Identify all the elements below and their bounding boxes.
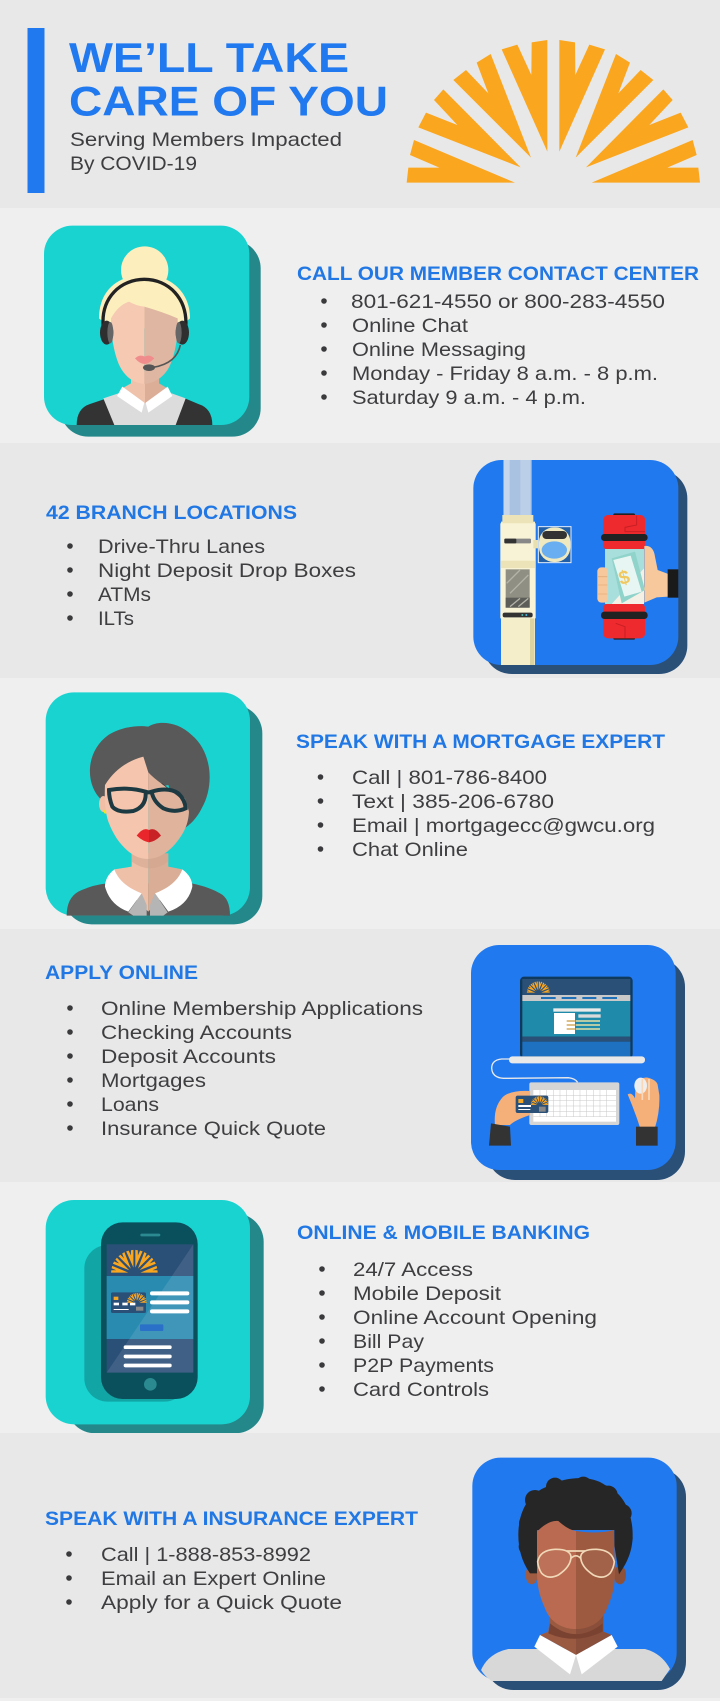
- icon: drive-thru tube station: $: [616, 567, 633, 590]
- icon: insurance expert man: [472, 1458, 686, 1690]
- subtitle: [70, 129, 342, 175]
- title: CARE OF YOU: [69, 78, 388, 124]
- bullet list: Chat Online: [352, 839, 468, 861]
- bullet list: Mobile Deposit: [353, 1283, 502, 1305]
- subtitle: By COVID-19: [70, 153, 197, 175]
- bullet list: Monday - Friday 8 a.m. - 8 p.m.: [352, 363, 658, 385]
- bullet list: Saturday 9 a.m. - 4 p.m.: [352, 387, 586, 409]
- bullet list: Card Controls: [353, 1379, 489, 1401]
- bullet list: P2P Payments: [353, 1355, 494, 1377]
- panel: insurance expert: [0, 1433, 720, 1698]
- bullet list: ILTs: [98, 608, 134, 630]
- bullet list: [66, 1544, 342, 1614]
- bullet list: Bill Pay: [353, 1331, 424, 1353]
- bullet list: Checking Accounts: [101, 1022, 292, 1044]
- bullet list: Loans: [101, 1094, 159, 1116]
- icon: smartphone: [46, 1200, 264, 1433]
- bullet list: Apply for a Quick Quote: [101, 1592, 342, 1614]
- bullet list: Online Messaging: [352, 339, 526, 361]
- bullet list: [67, 536, 356, 630]
- panel: member contact center: [0, 208, 720, 443]
- bullet list: [67, 998, 423, 1140]
- bullet list: Online Chat: [352, 315, 469, 337]
- heading: SPEAK WITH A MORTGAGE EXPERT: [296, 731, 665, 753]
- panel: online and mobile banking: [0, 1182, 720, 1433]
- accent bar: [28, 28, 44, 193]
- bullet list: Mortgages: [101, 1070, 206, 1092]
- panel: mortgage expert: [0, 678, 720, 929]
- icon: sun logo: [407, 40, 700, 183]
- bullet list: Call | 1-888-853-8992: [101, 1544, 311, 1566]
- heading: SPEAK WITH A INSURANCE EXPERT: [45, 1508, 418, 1530]
- bullet list: Email | mortgagecc@gwcu.org: [352, 815, 655, 837]
- heading: 42 BRANCH LOCATIONS: [46, 502, 297, 524]
- icon: laptop, keyboard and card: [471, 945, 685, 1180]
- bullet list: Online Membership Applications: [101, 998, 423, 1020]
- icon: mortgage expert woman: [46, 692, 262, 924]
- panel: apply online: [0, 929, 720, 1182]
- bullet list: [319, 1259, 597, 1401]
- bullet list: Night Deposit Drop Boxes: [98, 560, 356, 582]
- bullet list: Insurance Quick Quote: [101, 1118, 326, 1140]
- bullet list: Deposit Accounts: [101, 1046, 276, 1068]
- panel: branch locations: [0, 443, 720, 678]
- bullet list: 24/7 Access: [353, 1259, 473, 1281]
- bullet list: Online Account Opening: [353, 1307, 597, 1329]
- bullet list: [321, 291, 665, 409]
- heading: CALL OUR MEMBER CONTACT CENTER: [297, 263, 699, 285]
- bullet list: Email an Expert Online: [101, 1568, 326, 1590]
- subtitle: Serving Members Impacted: [70, 129, 342, 151]
- title: [69, 34, 388, 124]
- bullet list: [318, 767, 655, 861]
- bullet list: ATMs: [98, 584, 151, 606]
- icon: drive-thru tube station: [473, 460, 687, 674]
- bullet list: Drive-Thru Lanes: [98, 536, 265, 558]
- bullet list: Text | 385-206-6780: [352, 791, 554, 813]
- panel: header: [0, 0, 720, 208]
- title: WE’LL TAKE: [69, 34, 349, 81]
- icon: call center agent: [44, 226, 261, 437]
- heading: ONLINE & MOBILE BANKING: [297, 1222, 590, 1244]
- bullet list: Call | 801-786-8400: [352, 767, 547, 789]
- bullet list: 801-621-4550 or 800-283-4550: [351, 291, 665, 313]
- heading: APPLY ONLINE: [45, 962, 198, 984]
